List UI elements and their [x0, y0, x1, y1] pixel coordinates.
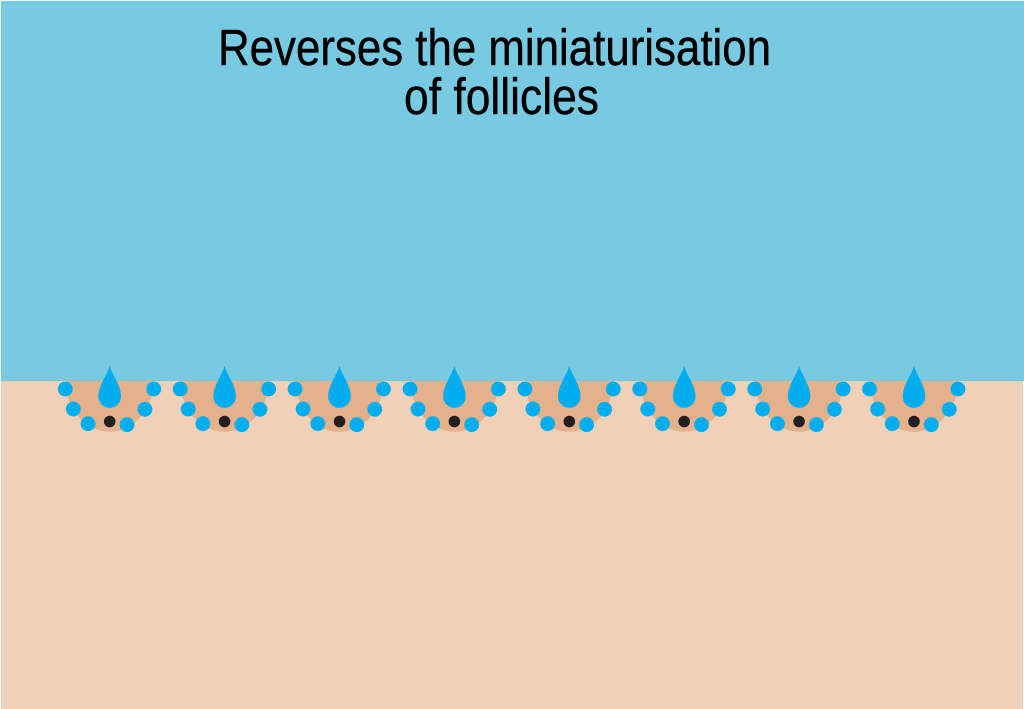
follicle 1 — [58, 366, 161, 432]
follicle 5 — [518, 366, 621, 432]
title — [218, 19, 771, 125]
follicle 2 — [173, 366, 276, 432]
panel: sky background — [1, 1, 1024, 381]
follicle 6 — [632, 366, 736, 432]
follicle 3 — [288, 366, 391, 432]
title: Reverses the miniaturisation — [218, 19, 771, 76]
title: of follicles — [404, 68, 599, 125]
follicle 4 — [403, 366, 506, 432]
panel: skin background — [1, 381, 1023, 709]
follicle 8 — [862, 366, 965, 432]
follicle 7 — [747, 366, 850, 432]
